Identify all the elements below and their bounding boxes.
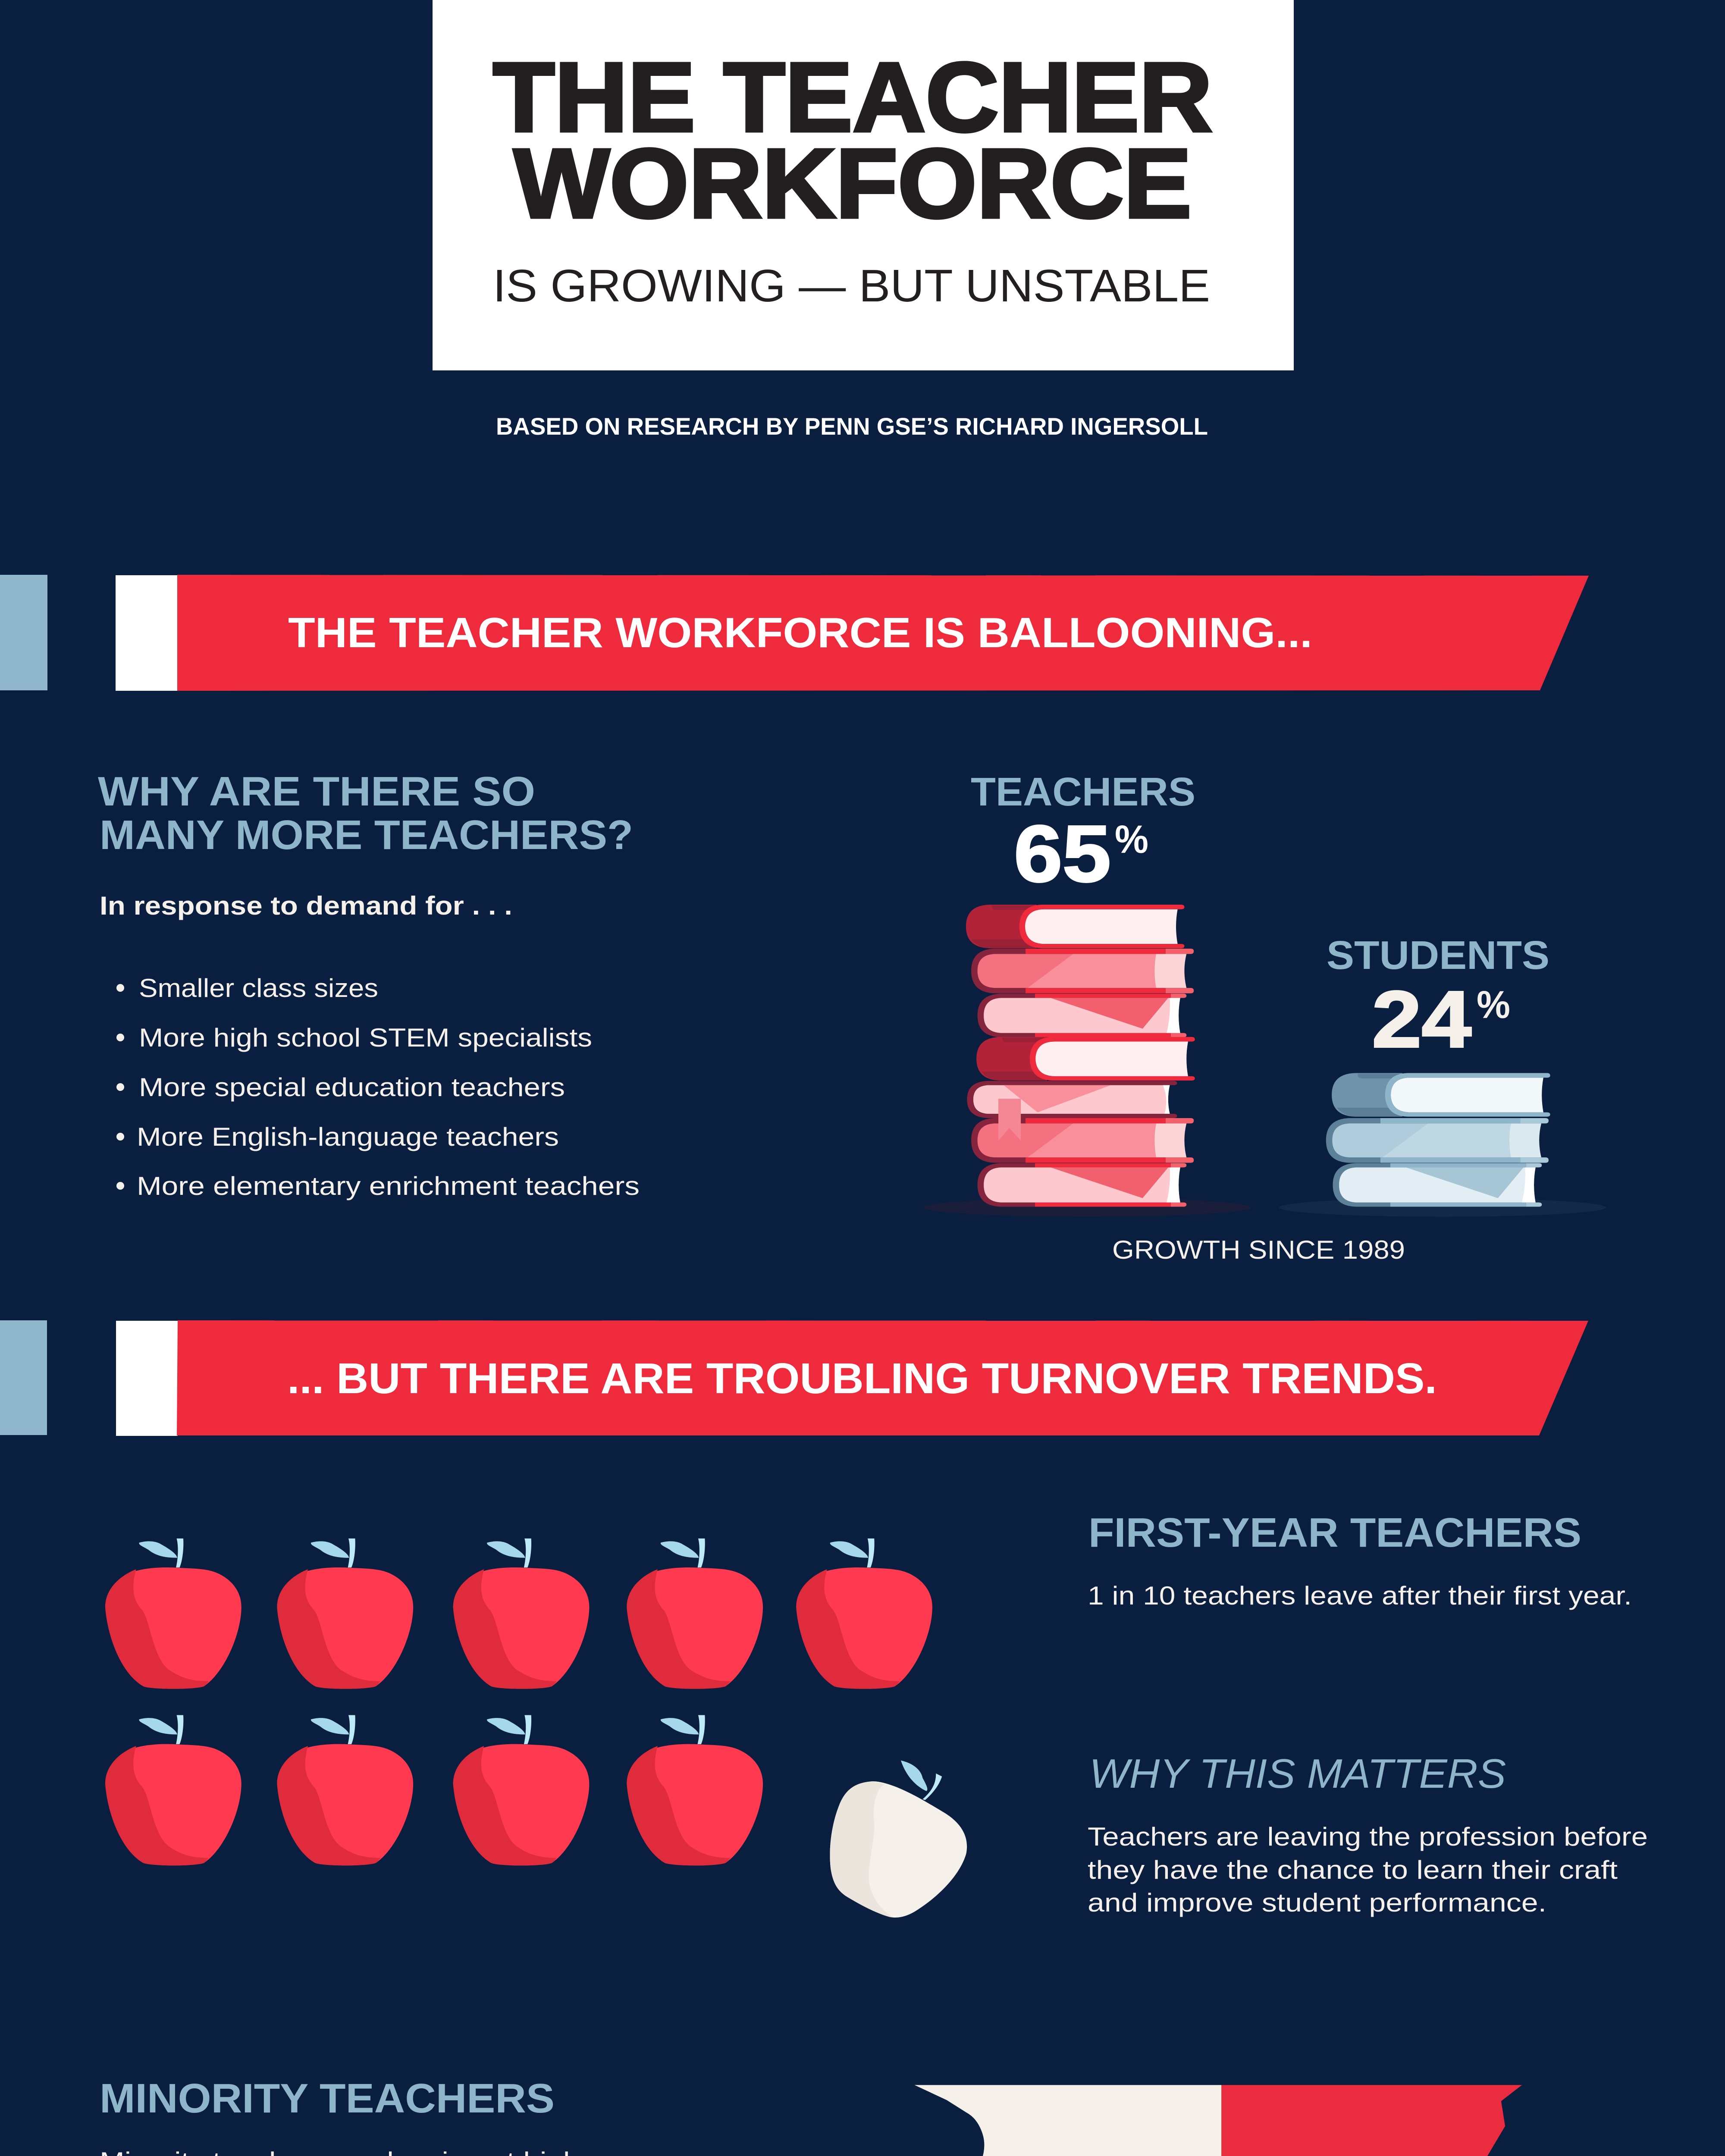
bullet list [116,974,640,1200]
bullet list: More high school STEM specialists [139,1023,592,1052]
panel: why so many teachers [98,768,640,1200]
banner: turnover trends [0,1320,1588,1436]
heading: MANY MORE TEACHERS? [100,812,633,858]
why this matters text: Teachers are leaving the profession before [1088,1822,1648,1851]
students label: STUDENTS [1327,933,1549,978]
why this matters heading: WHY THIS MATTERS [1089,1751,1506,1797]
finding: 1 in 10 teachers leave after their first year. [1088,1581,1632,1610]
teachers label: % [1115,818,1148,862]
icon: cream profile [886,2085,1226,2156]
icon: red book stack [924,905,1251,1217]
source credit: BASED ON RESEARCH BY PENN GSE’S RICHARD INGERSOLL [496,413,1208,440]
why this matters text: and improve student performance. [1088,1888,1546,1917]
subtitle: IS GROWING — BUT UNSTABLE [493,260,1210,311]
icon: blue book stack [1279,1073,1606,1217]
bullet list: More English-language teachers [137,1122,559,1151]
heading [98,768,633,858]
why this matters text [1088,1822,1648,1917]
heading: FIRST-YEAR TEACHERS [1088,1510,1581,1556]
heading: WHY ARE THERE SO [98,768,535,815]
icon: facing profiles [886,2085,1585,2156]
chart: growth since 1989 [924,769,1606,1264]
title card [433,0,1294,370]
students label: 24 [1372,975,1471,1064]
panel: minority teachers [99,2075,663,2156]
bullet list: More special education teachers [139,1073,565,1102]
banner: ballooning [0,575,1589,691]
banner: turnover trends: ... BUT THERE ARE TROUBLING TURNOVER TRENDS. [287,1354,1437,1403]
teachers label: TEACHERS [971,769,1195,814]
bullet list: More elementary enrichment teachers [137,1172,640,1200]
lead-in: In response to demand for . . . [100,891,512,920]
students label: % [1477,984,1510,1027]
students label [1327,933,1549,1064]
icon: fallen white apple [830,1761,967,1918]
bullet list: Smaller class sizes [139,974,378,1003]
title: WORKFORCE [514,129,1192,238]
teachers label: 65 [1014,809,1111,899]
title [493,43,1212,238]
panel: first-year teachers [1088,1510,1648,1917]
heading: MINORITY TEACHERS [100,2075,555,2122]
banner: ballooning: THE TEACHER WORKFORCE IS BALLOONING... [288,609,1312,656]
icon: apples 9 red 1 white [105,1539,967,1918]
teachers label [971,769,1195,899]
why this matters text: they have the chance to learn their craft [1088,1855,1618,1884]
chart caption: GROWTH SINCE 1989 [1112,1235,1405,1264]
title: THE TEACHER [493,43,1212,152]
icon: red profile [1221,2085,1585,2156]
